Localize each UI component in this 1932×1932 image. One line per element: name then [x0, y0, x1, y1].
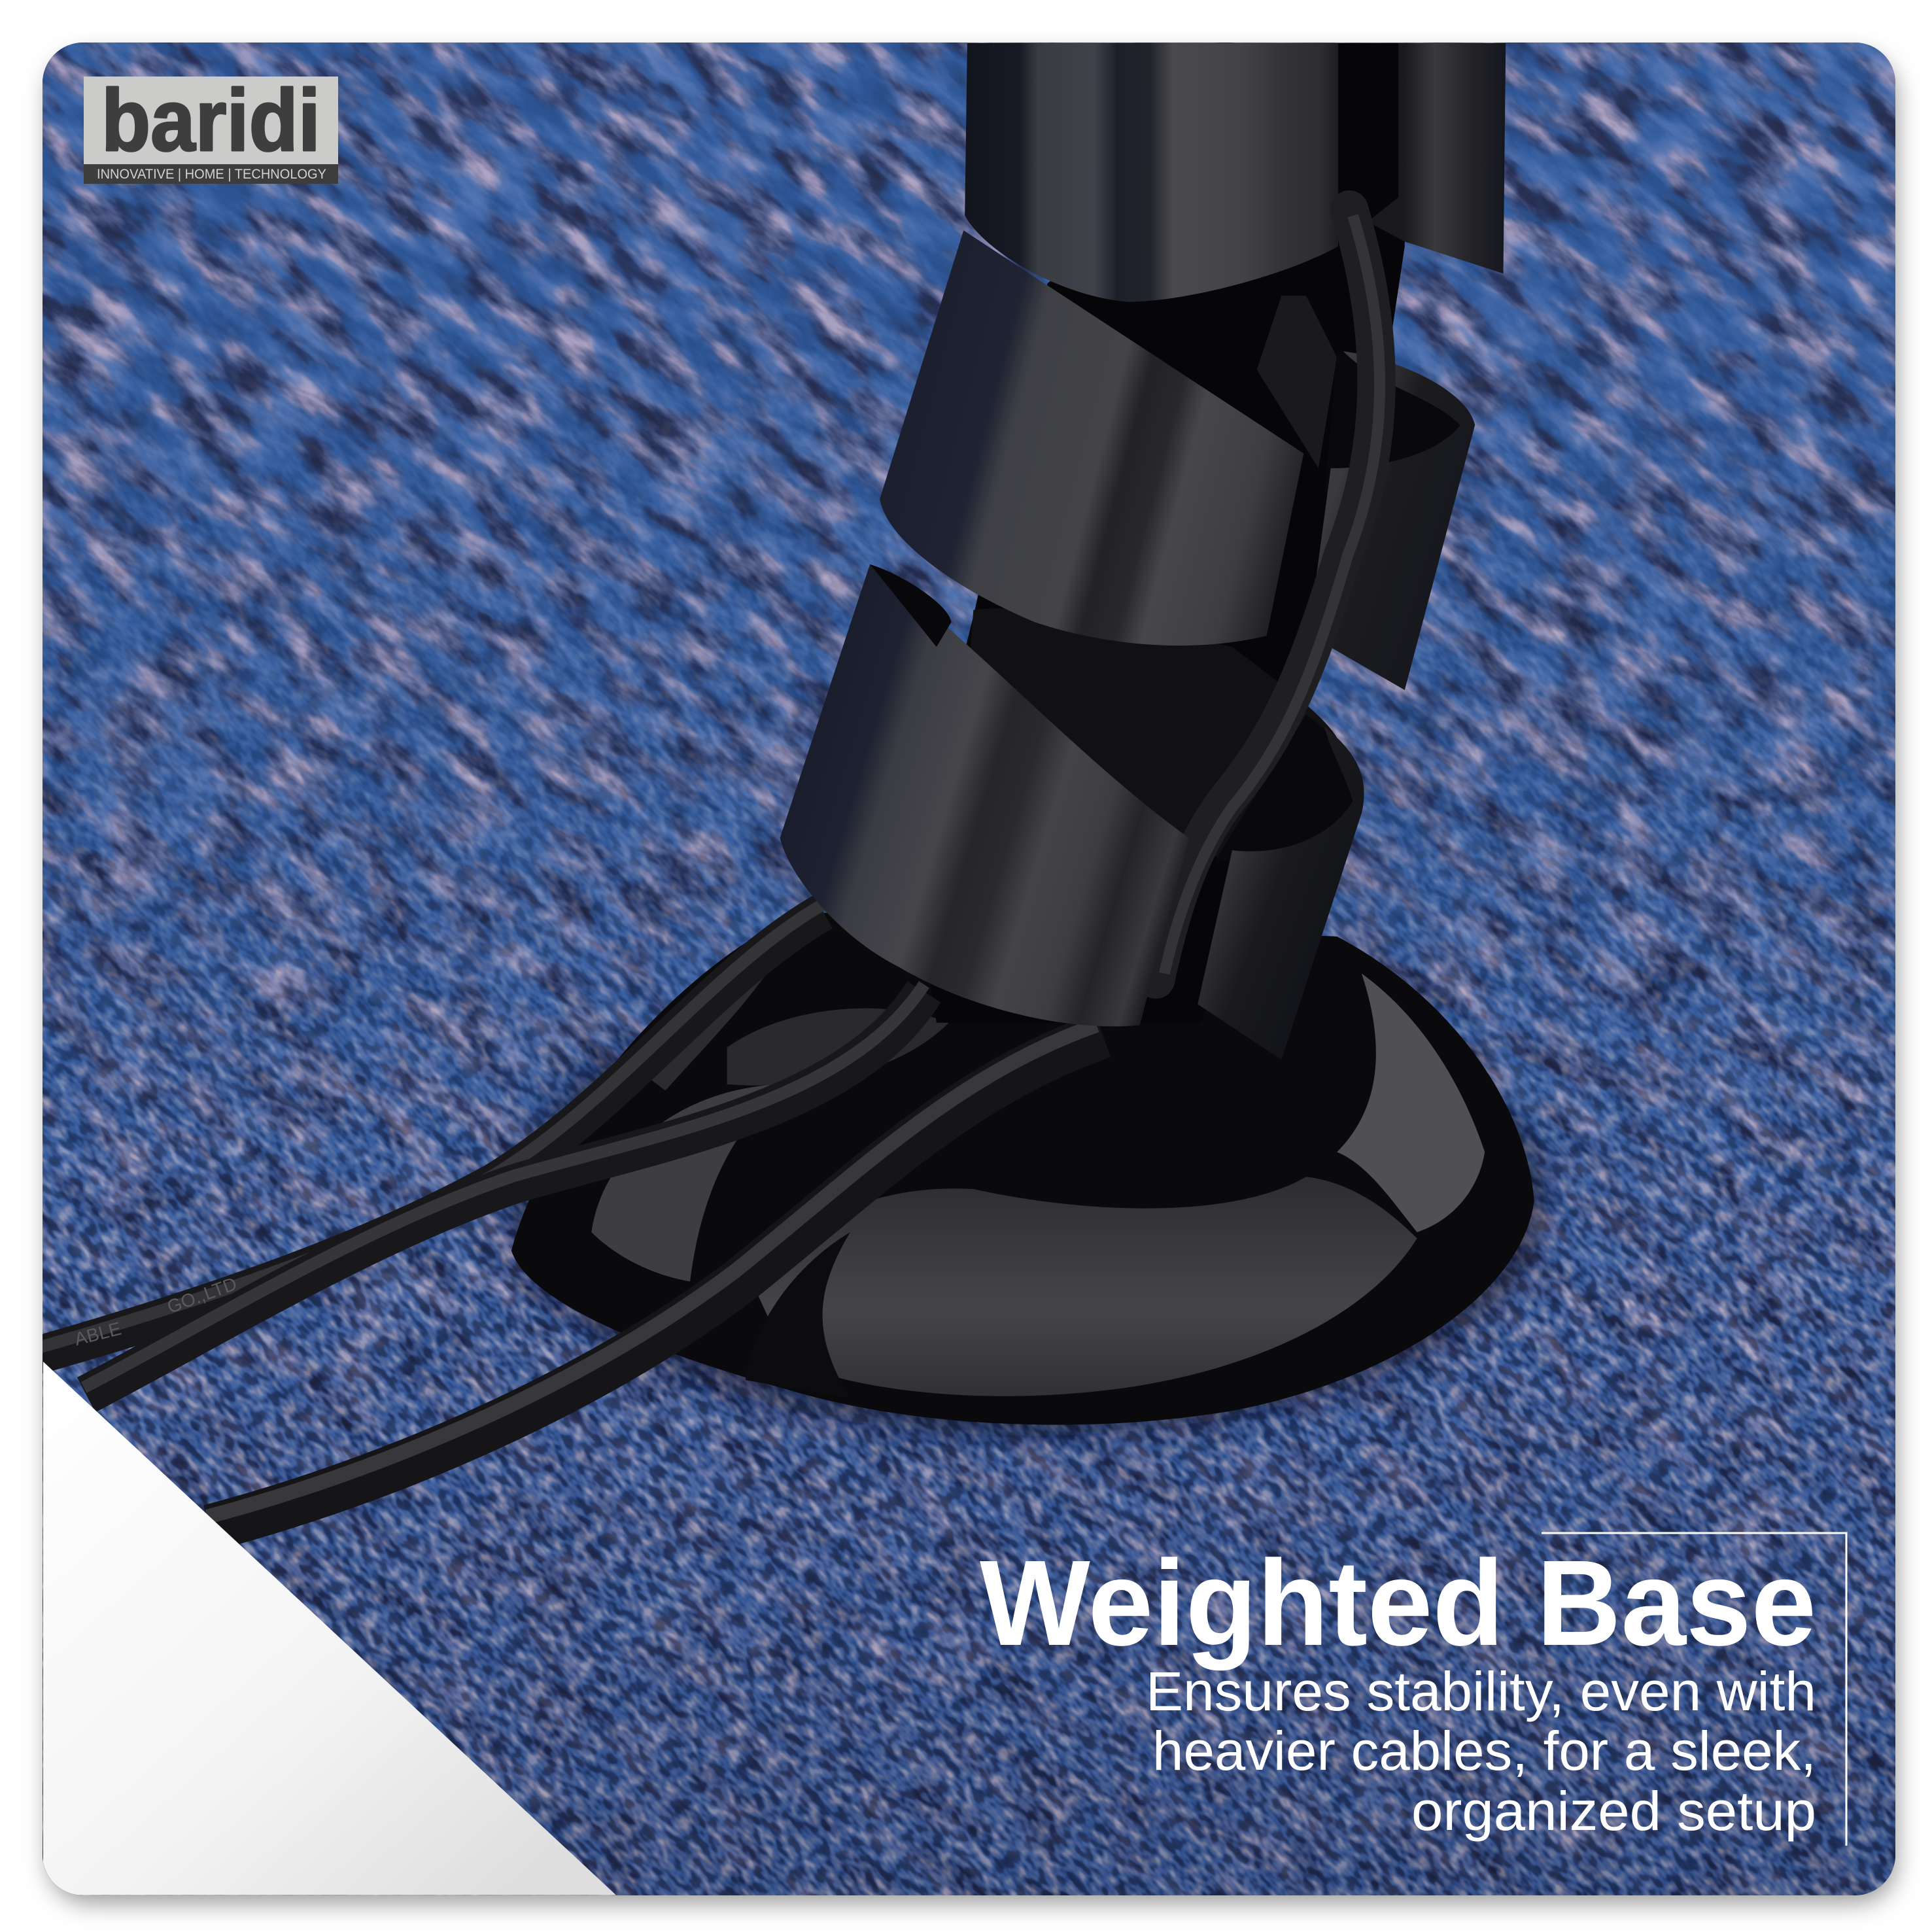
dome lower highlight [751, 1177, 1417, 1396]
right middle band interior [1324, 351, 1475, 493]
description: Ensures stability, even with [1146, 1661, 1816, 1722]
lower right band interior [1214, 715, 1364, 863]
dome dark wedge [746, 1232, 850, 1398]
rear coil pieces [967, 608, 1343, 863]
logo [84, 72, 338, 184]
bottom band [780, 564, 1189, 1026]
middle band [880, 230, 1303, 646]
cable printing: GO.,LTD [164, 1273, 239, 1317]
title: Weighted Base [980, 1536, 1816, 1671]
spiral band right top [1368, 43, 1506, 273]
cables across the base [37, 905, 1103, 1528]
logo wordmark: baridi [101, 72, 320, 169]
black core of spiral [912, 43, 1405, 1023]
rear lip of bottom band [870, 564, 951, 647]
top collar band [965, 43, 1338, 302]
base shadow on carpet [511, 967, 1546, 1436]
logo tagline: INNOVATIVE | HOME | TECHNOLOGY [97, 167, 326, 182]
white table corner [43, 1362, 616, 1895]
description: organized setup [1411, 1780, 1816, 1842]
weighted base dome [511, 912, 1534, 1425]
dome right highlight [1337, 973, 1485, 1232]
lower right band [1198, 727, 1364, 1060]
cable front [209, 1035, 1103, 1528]
description [1146, 1661, 1816, 1842]
cable left middle [86, 992, 924, 1395]
corner frame line [1542, 1533, 1846, 1846]
dome centre reflection [727, 1009, 949, 1086]
cable left outer [37, 912, 823, 1355]
cable printing: ABLE [73, 1318, 123, 1349]
description: heavier cables, for a sleek, [1152, 1720, 1816, 1782]
dome upper reflection [641, 937, 789, 1090]
dome left highlight [591, 1084, 789, 1281]
cable guide up the spine [1156, 209, 1377, 980]
cable printing [73, 1273, 239, 1349]
right middle band [1309, 351, 1475, 690]
